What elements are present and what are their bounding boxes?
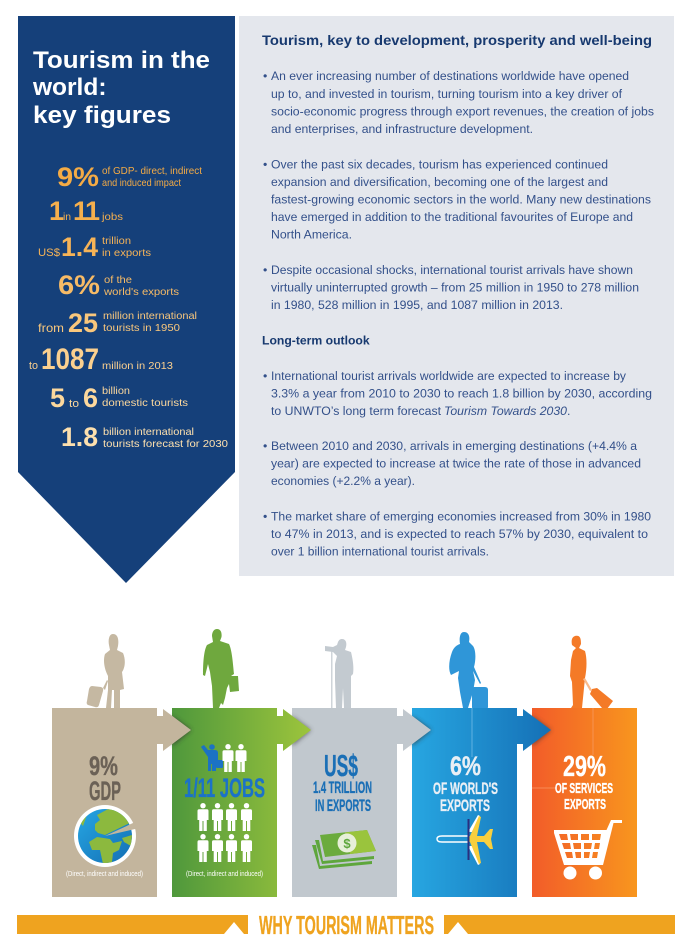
bullet paragraph 2: have emerged in addition to the traditional favourites of Europe and [271,210,633,224]
bar 3 content: US$ 1.4 trillion [312,748,376,869]
title: key figures [33,102,171,129]
label: 1/11 jobs: 1/11 JOBS [184,773,265,803]
panel background [239,16,674,576]
figure: 1 in 11 jobs: 1 [49,196,64,226]
figure: to 1087 million: 1087 [41,343,99,376]
label: US$ 1.4 trillion in exports: US$ [324,748,358,783]
figure: 1.8 billion: tourists forecast for 2030 [103,439,228,450]
heading: Tourism, key to development, prosperity and well-being [262,33,652,48]
silhouette: man with rolling bag [570,636,613,709]
bullet paragraph 1: and enterprises, and infrastructure development. [271,122,533,136]
figure: 1.8 billion: billion international [103,427,194,438]
figure: 1 in 11 jobs: 11 [73,196,100,226]
figure: 6% of world's exports: of the [104,275,132,286]
bullet paragraph 1: socio-economic progress through export revenues, the creation of jobs [271,104,654,118]
bullet paragraph 2: expansion and diversification, becoming one of the largest and [271,175,608,189]
bullet paragraph 2: fastest-growing economic sectors in the world. Many new destinations [271,192,651,206]
label: 6% of world's exports: 6% [450,751,481,781]
bullet paragraph 1: • [263,69,267,83]
bar 2 content: 1/11 jobs [184,744,265,878]
figure: from 25 million [38,308,197,338]
figure: US$ 1.4 trillion [38,232,151,262]
panel: tourism text [239,16,674,576]
bullet paragraph 3: • [263,263,267,277]
figure: US$ 1.4 trillion: trillion [102,236,131,247]
label: 9% GDP: 9% [89,751,118,781]
figure: to 1087 million: to [29,360,38,372]
title: world: [32,74,106,101]
figure: 5 to 6 billion: 5 [50,383,65,413]
figure: 5 to 6 billion: billion [102,386,130,397]
title: Tourism in the [33,47,210,74]
bullet paragraph 2: North America. [271,228,352,242]
figure: from 25 million: million international [103,311,197,322]
icon: blue traveller [201,744,223,771]
figure: 9% of GDP: and induced impact [102,178,181,189]
bullet paragraph 4: • [263,369,267,383]
figure: US$ 1.4 trillion: US$ [38,247,60,259]
figure: US$ 1.4 trillion: in exports [102,248,151,259]
bullet paragraph 5: Between 2010 and 2030, arrivals in emerging destinations (+4.4% a [271,439,637,453]
panel: key figures [18,16,235,583]
label: 9% GDP: GDP [89,776,121,806]
label: 29% of services exports: EXPORTS [564,796,606,813]
icon: globe with pie slice [74,805,136,867]
label: 6% of world's exports [433,751,498,815]
bullet paragraph 1: up to, and invested in tourism, turning tourism into a key driver of [271,87,623,101]
banner: why tourism matters [17,910,675,940]
figure: 1.8 billion: 1.8 [61,422,98,452]
label: 6% of world's exports: EXPORTS [440,796,490,815]
figure: US$ 1.4 trillion: 1.4 [61,232,98,262]
bullet paragraph 3: Despite occasional shocks, international tourist arrivals have shown [271,263,633,277]
figure: 6% of world's exports: world's exports [103,287,179,298]
figure: 1 in 11 jobs: jobs [101,212,123,223]
bullet paragraph 6: • [263,510,267,524]
figure: 9% of GDP: of GDP- direct, indirect [102,166,202,177]
bullet paragraph 4: 3.3% a year from 2010 to 2030 to reach 1.8 billion by 2030, according [271,386,652,400]
label: US$ 1.4 trillion in exports [313,748,372,815]
banner title: WHY TOURISM MATTERS [259,910,434,940]
bar 1 content: 9% GDP [66,751,144,878]
bar 4: blue with arrow [412,708,551,897]
label: 9% GDP [89,751,121,806]
silhouette: man with bag [203,629,239,708]
bullet paragraph 5: year) are expected to increase at twice the rate of those in advanced [271,456,641,470]
figure: 1.8 billion [61,422,228,452]
bar 5 content: 29% of services exports [554,751,622,880]
bar 5: orange [532,708,637,897]
figure: from 25 million: tourists in 1950 [103,323,180,334]
figure: 6% of world's exports [58,270,179,300]
bullet paragraph 2: • [263,158,267,172]
icon: airplane [437,815,493,865]
bullet paragraph 2: Over the past six decades, tourism has experienced continued [271,158,608,172]
figure: 9% of GDP [57,162,202,192]
figure: to 1087 million [29,343,173,376]
figure: 5 to 6 billion: 6 [83,383,98,413]
infographic bars [52,708,637,897]
bullet paragraph 6: to 47% in 2013, and is expected to reach 57% by 2030, equivalent to [271,527,648,541]
label: 6% of world's exports: OF WORLD'S [433,779,498,798]
figure: 1 in 11 jobs: in [63,212,71,223]
figure: 9% of GDP: 9% [57,162,99,192]
bullet paragraph 5: • [263,439,267,453]
bullet paragraph 4: . [567,404,570,418]
icon: white workers row 1 [222,744,246,772]
icon: white workers rows [198,803,252,862]
figure: from 25 million: 25 [68,308,98,338]
silhouette: woman with suitcase [87,634,125,708]
label: 29% of services exports: 29% [563,751,606,783]
bullet paragraph 6: The market share of emerging economies increased from 30% in 1980 [271,510,651,524]
label: 29% of services exports [555,751,613,813]
figure: 5 to 6 billion: domestic tourists [102,398,188,409]
bullet paragraph 1: An ever increasing number of destinations worldwide have opened [271,69,629,83]
silhouette: photographer [325,639,353,708]
panel background arrow [18,16,235,583]
label: US$ 1.4 trillion in exports: IN EXPORTS [315,796,371,815]
figure: 5 to 6 billion [50,383,188,413]
bullet paragraph 3: in 1980, 528 million in 1995, and 1087 million in 2013. [271,298,563,312]
bullet paragraph 3: virtually uninterrupted growth – from 25 million in 1950 to 278 million [271,280,639,294]
banner bar right [444,915,675,934]
figure: 5 to 6 billion: to [69,398,79,410]
icon: banknotes: $ [343,836,351,851]
bullet paragraph 6: over 1 billion international tourist arrivals. [271,544,489,558]
banner bar left [17,915,248,934]
icon: shopping cart [554,820,622,880]
caption: (Direct, indirect and induced) [186,871,263,878]
label: US$ 1.4 trillion in exports: 1.4 TRILLION [313,778,372,797]
bullet paragraph 5: economies (+2.2% a year). [271,474,415,488]
caption: (Direct, indirect and induced) [66,871,143,878]
bar 2: green with arrow [172,708,311,897]
figure: 1 in 11 jobs [49,196,123,226]
bar 3: grey with arrow [292,708,431,897]
bullet paragraph 4: to UNWTO’s long term forecast [271,404,442,418]
bullet paragraph 4: Tourism Towards 2030 [444,404,567,418]
subheading: long-term outlook: Long-term outlook [262,334,370,348]
silhouette: woman with wheeled case [449,632,488,709]
bullet paragraph 4: International tourist arrivals worldwide are expected to increase by [271,369,627,383]
label: 29% of services exports: OF SERVICES [555,780,613,797]
bar 4 content: 6% of world's exports [433,751,498,865]
figure: 6% of world's exports: 6% [58,270,100,300]
figure: to 1087 million: million in 2013 [102,361,173,372]
bar 1: tan with arrow [52,708,191,897]
figure: from 25 million: from [38,321,64,335]
